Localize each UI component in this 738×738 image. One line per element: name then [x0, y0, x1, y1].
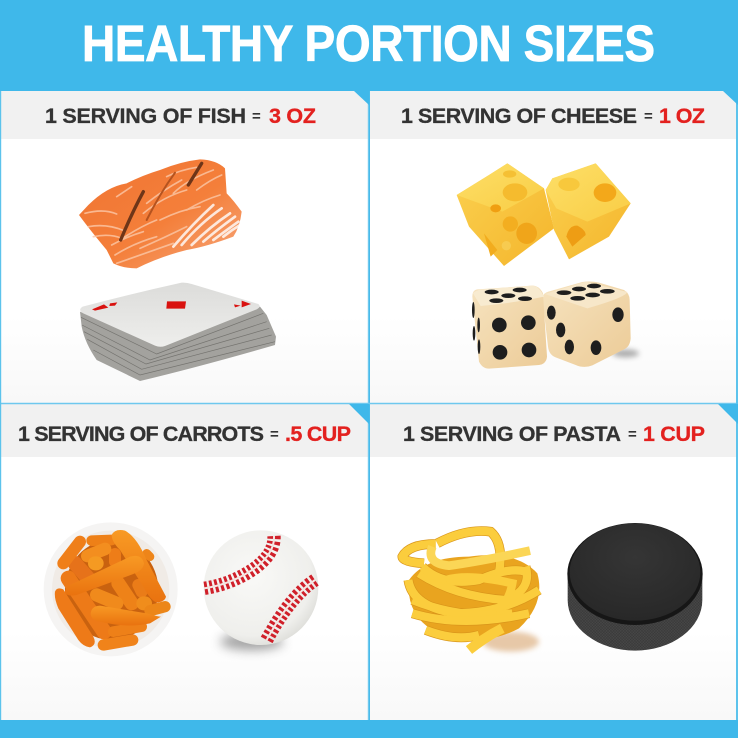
heading: fish: 1 SERVING OF FISH [45, 104, 246, 128]
panel: pasta [370, 404, 738, 720]
panel: fish [1, 91, 369, 403]
heading: pasta: 1 SERVING OF PASTA [403, 422, 621, 446]
icon: grilled salmon [79, 159, 242, 268]
icon: baseball [204, 530, 318, 650]
panel: carrots [1, 404, 369, 720]
icon: bowl of carrots [44, 522, 178, 656]
icon: cheese cubes [457, 163, 631, 266]
heading: carrots: 1 SERVING OF CARROTS [18, 422, 264, 446]
panel: cheese [370, 91, 738, 403]
heading: pasta: = [628, 426, 637, 443]
icon: dice [472, 281, 639, 369]
heading: carrots: .5 CUP [285, 422, 351, 446]
heading: fish: 3 OZ [269, 104, 316, 128]
heading: cheese: 1 SERVING OF CHEESE [401, 104, 637, 128]
heading: carrots: = [270, 426, 279, 443]
heading: pasta: 1 CUP [643, 422, 705, 446]
icon: hockey puck [567, 523, 703, 651]
header band: cheese [370, 91, 738, 139]
heading: cheese: = [644, 108, 653, 125]
title: HEALTHY PORTION SIZES [82, 16, 655, 73]
heading: cheese: 1 OZ [659, 104, 705, 128]
icon: deck of cards [80, 283, 276, 381]
header band: pasta [370, 404, 738, 457]
header band: carrots [1, 404, 369, 457]
footer bar [0, 720, 738, 738]
header band: fish [1, 91, 369, 139]
icon: tagliatelle nest [402, 531, 539, 652]
heading: fish: = [252, 108, 261, 125]
